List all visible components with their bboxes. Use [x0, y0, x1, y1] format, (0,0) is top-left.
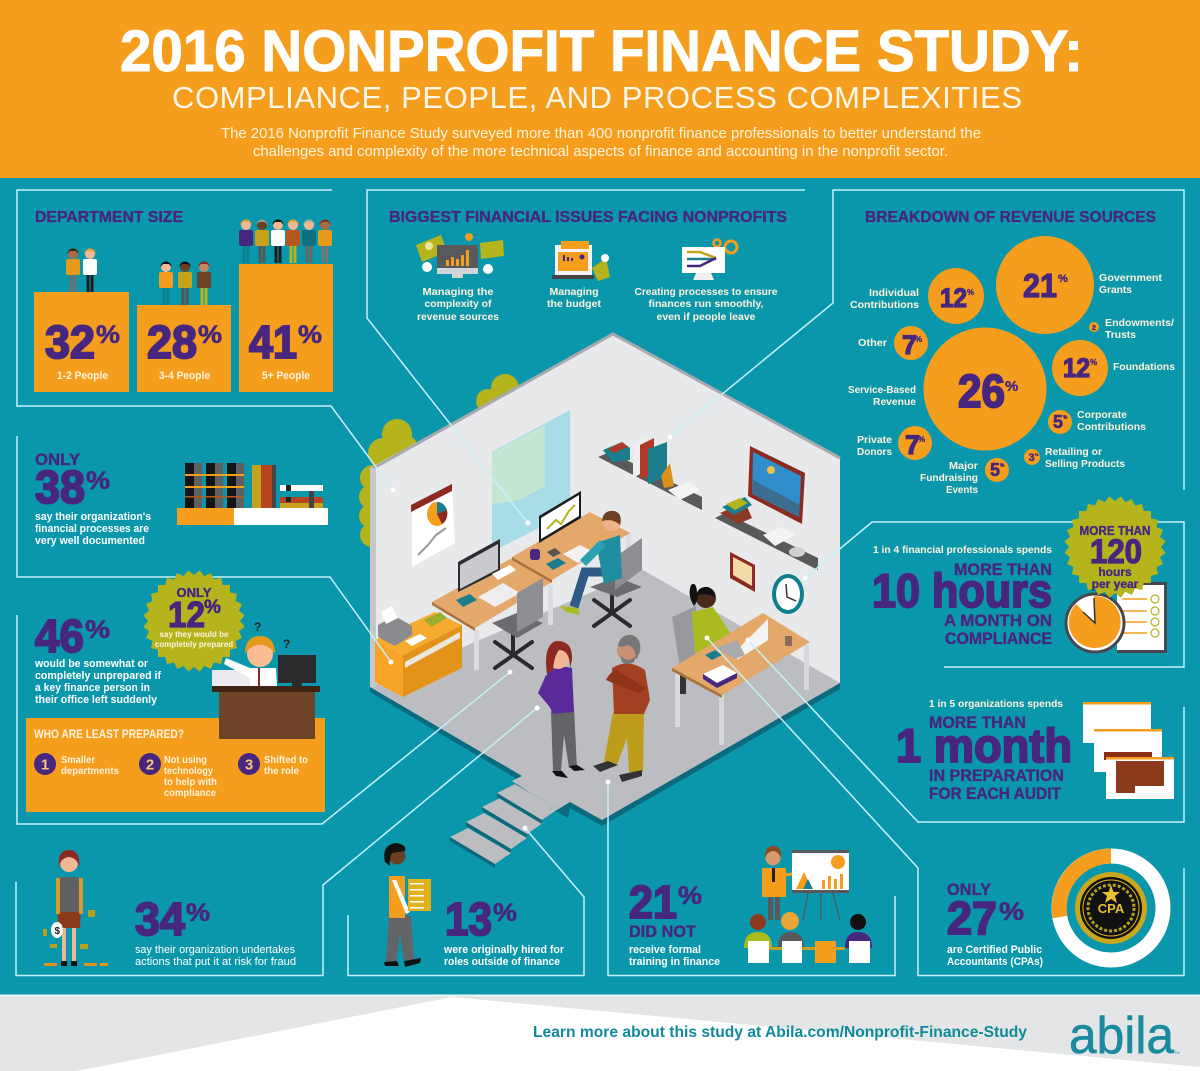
item 2: 2 — [146, 756, 154, 774]
description — [135, 944, 296, 968]
bubble values: % — [1000, 463, 1005, 469]
wall shelf with books — [598, 436, 702, 510]
icon: budget monitor — [552, 241, 610, 281]
text: budget: the budget — [547, 298, 601, 310]
badge: 120 hours: hours — [1098, 565, 1132, 579]
headline: FOR EACH AUDIT — [929, 784, 1062, 803]
room base shadow — [370, 678, 840, 826]
keyboard and papers — [478, 583, 520, 607]
bubble values: % — [1005, 378, 1018, 395]
bubble values: 2 — [1092, 325, 1096, 332]
seated man and chair — [560, 511, 642, 626]
bubble labels: Events — [946, 484, 978, 496]
panel: biggest financial issues — [389, 209, 787, 323]
bubble labels: Endowments/ — [1105, 317, 1174, 329]
text: revenue sources: complexity of — [424, 298, 492, 310]
icon: woman with money bag: $ — [54, 926, 60, 937]
description: their office left suddenly — [35, 694, 158, 706]
heading: BREAKDOWN OF REVENUE SOURCES — [865, 209, 1156, 226]
question marks: ? — [283, 637, 290, 651]
badge: only 12%: 12 — [168, 594, 205, 635]
bubble values: 5 — [990, 460, 1000, 480]
bubble labels: Service-Based — [848, 384, 916, 396]
item 2: to help with — [164, 776, 217, 788]
study link: Learn more about this study at Abila.com/Nonprofit-Finance-Study — [533, 1024, 1027, 1041]
headline: A MONTH ON — [944, 611, 1052, 630]
bubble labels: Fundraising — [920, 472, 978, 484]
text: budget: Managing — [550, 286, 598, 298]
bubble values: 3 — [1028, 452, 1035, 464]
only label: ONLY — [35, 450, 81, 469]
second shelf — [715, 497, 818, 570]
34 percent: 34 — [135, 893, 185, 945]
description: roles outside of finance — [444, 956, 560, 968]
stairs — [450, 784, 558, 868]
bubble values: 12 — [1063, 353, 1090, 383]
badge: only 12%: say they would be — [160, 630, 229, 639]
woman's chair — [672, 606, 700, 694]
bar: 1-2 people: % — [96, 321, 120, 349]
abila logo: abila — [1069, 1007, 1174, 1065]
item 3: Shifted to — [264, 754, 308, 766]
footer — [0, 994, 1200, 1071]
13 percent: 13 — [445, 893, 492, 945]
badge: only 12% — [143, 570, 245, 672]
badge: 120 hours: 120 — [1090, 533, 1142, 571]
bubble labels: Selling Products — [1045, 458, 1125, 470]
27 percent — [947, 892, 1024, 944]
left monitor — [458, 539, 500, 592]
bubble labels: Trusts — [1105, 329, 1136, 341]
did not: DID NOT — [629, 922, 697, 941]
description: Accountants (CPAs) — [947, 956, 1043, 968]
badge: 120 hours: per year — [1092, 577, 1139, 591]
bubble values: % — [967, 288, 974, 297]
bubble labels: Grants — [1099, 284, 1132, 296]
man's legs — [574, 572, 605, 607]
framed picture — [748, 446, 805, 524]
donut chart — [1059, 856, 1163, 960]
badge: 120 hours — [1064, 496, 1166, 598]
27 percent: % — [999, 898, 1024, 926]
description: were originally hired for — [443, 944, 565, 956]
item 1: Smaller — [61, 754, 95, 766]
abila logo: TM — [1174, 1050, 1180, 1055]
text: processes — [634, 286, 778, 323]
bar: 5+ people: % — [298, 321, 322, 349]
item 3: 3 — [245, 756, 253, 774]
text: revenue sources — [417, 286, 499, 323]
27 percent: 27 — [947, 892, 997, 944]
icon: process monitor — [682, 240, 737, 280]
heading: DEPARTMENT SIZE — [35, 209, 183, 226]
bubble labels: Revenue — [873, 396, 916, 408]
people: 5+ — [239, 220, 332, 263]
panel: revenue sources — [848, 209, 1175, 496]
text: processes: finances run smoothly, — [648, 298, 764, 310]
panel: CPAs 27% — [947, 856, 1163, 968]
header band — [0, 0, 1200, 178]
13 percent: % — [493, 899, 517, 927]
bubble values: 5 — [1053, 412, 1063, 432]
bubble labels: Contributions — [1077, 421, 1146, 433]
38 percent: % — [86, 467, 110, 495]
description: completely unprepared if — [35, 670, 161, 682]
man's torso — [596, 535, 622, 584]
description: a key finance person in — [35, 682, 150, 694]
bubbles — [894, 236, 1108, 482]
panel: audit preparation — [896, 698, 1174, 803]
question marks: ? — [254, 620, 261, 634]
bubble labels: Foundations — [1113, 361, 1175, 373]
callout dots — [388, 434, 808, 830]
panel: 46% unprepared — [26, 570, 325, 812]
description — [443, 944, 565, 968]
headline: 10 hours — [872, 564, 1052, 617]
21 percent: % — [678, 882, 702, 910]
icon: shelf of binders — [177, 463, 328, 525]
teal background — [0, 178, 1200, 996]
bar: 3-4 people: 28 — [147, 316, 197, 368]
bubble labels: Retailing or — [1045, 446, 1102, 458]
bar: 3-4 people — [137, 305, 231, 392]
intro text — [221, 126, 981, 160]
left wall edge — [370, 468, 376, 687]
woman at laptop — [690, 584, 735, 655]
bar: 3-4 people: % — [198, 321, 222, 349]
audience — [744, 912, 872, 963]
description: training in finance — [629, 956, 720, 968]
left desk — [432, 539, 553, 670]
headline: COMPLIANCE — [945, 629, 1052, 648]
wall clock — [772, 574, 804, 614]
panel: hired outside finance 13% — [384, 843, 565, 968]
window — [492, 410, 570, 552]
right monitor with line chart — [539, 491, 581, 543]
bubble labels: Donors — [857, 446, 892, 458]
people: 1-2 — [66, 248, 97, 292]
icon: presenter with board — [744, 846, 872, 963]
headline: MORE THAN — [929, 713, 1026, 732]
bubble labels: Government — [1099, 272, 1162, 284]
description: say their organization's — [35, 511, 151, 523]
46 percent: 46 — [35, 610, 84, 662]
bar: 1-2 people: 32 — [45, 316, 95, 368]
intro text: The 2016 Nonprofit Finance Study surveyed more than 400 nonprofit finance professionals to better understand the — [221, 126, 981, 142]
item 2 — [139, 753, 217, 799]
bushes behind the room — [359, 374, 519, 547]
bubble values: % — [1058, 273, 1068, 285]
bar: 5+ people: 5+ People — [262, 370, 310, 382]
phone — [705, 650, 722, 660]
panel: fraud risk 34% — [43, 850, 296, 968]
bubble values: 7 — [905, 430, 920, 460]
text: budget — [547, 286, 601, 310]
bar: 1-2 people: 1-2 People — [57, 370, 108, 382]
text: revenue sources: revenue sources — [417, 311, 499, 323]
intro line: 1 in 4 financial professionals spends — [873, 544, 1052, 556]
bubble labels — [848, 272, 1175, 496]
item 2: compliance — [164, 787, 216, 799]
pen cup — [785, 636, 792, 646]
item 1: departments — [61, 765, 119, 777]
wall poster with pie chart — [411, 484, 455, 567]
filing cabinet with printer — [375, 606, 462, 697]
34 percent — [135, 893, 210, 945]
icon: man carrying papers — [384, 843, 431, 967]
standing woman — [538, 641, 585, 778]
laptop — [737, 619, 768, 660]
38 percent — [35, 461, 110, 513]
intro text: challenges and complexity of the more technical aspects of finance and accounting in the nonprofit sector. — [253, 144, 948, 160]
bar: 5+ people — [239, 264, 333, 392]
21 percent: 21 — [629, 876, 677, 928]
bubble values: % — [918, 435, 925, 444]
text: processes: Creating processes to ensure — [634, 286, 778, 298]
bubble labels: Other — [858, 337, 887, 349]
description: receive formal — [629, 944, 701, 956]
bubble values: 7 — [902, 330, 917, 360]
right desk — [512, 491, 631, 583]
bubble labels: Major — [949, 460, 978, 472]
item 3 — [238, 753, 308, 777]
item 3: the role — [264, 765, 299, 777]
subtitle: COMPLIANCE, PEOPLE, AND PROCESS COMPLEXITIES — [172, 80, 1022, 115]
icon: clock — [1066, 594, 1124, 652]
34 percent: % — [186, 899, 210, 927]
38 percent: 38 — [35, 461, 85, 513]
description — [35, 511, 151, 547]
bar: 5+ people: 41 — [249, 316, 297, 368]
description: very well documented — [35, 535, 145, 547]
intro line: 1 in 5 organizations spends — [929, 698, 1063, 710]
panel: no training 21% — [629, 846, 872, 968]
icon: monitor with revenue — [416, 233, 504, 278]
heading: BIGGEST FINANCIAL ISSUES FACING NONPROFITS — [389, 209, 787, 226]
headline — [872, 560, 1052, 648]
item 1 — [34, 753, 119, 777]
badge: 120 hours: MORE THAN — [1080, 524, 1150, 538]
headline: MORE THAN — [954, 560, 1052, 579]
certificate — [730, 552, 755, 592]
isometric office room — [370, 334, 840, 826]
right desk with laptop — [672, 613, 810, 745]
bubble values: 21 — [1023, 267, 1057, 304]
headline: IN PREPARATION — [929, 766, 1064, 785]
people: 3-4 — [159, 262, 211, 305]
description — [947, 944, 1043, 968]
description: actions that put it at risk for fraud — [135, 956, 296, 968]
description: say their organization undertakes — [135, 944, 295, 956]
mug — [530, 549, 540, 560]
46 percent — [35, 610, 110, 662]
bubble values: 26 — [958, 365, 1005, 417]
headline: 1 month — [896, 719, 1072, 772]
headline — [896, 713, 1072, 803]
badge: only 12%: completely prepared — [155, 640, 233, 649]
standing man — [593, 635, 650, 782]
left office chair — [492, 578, 543, 668]
walls — [370, 334, 840, 687]
question marks — [254, 620, 290, 651]
badge: only 12%: % — [204, 597, 221, 618]
bubble labels: Corporate — [1077, 409, 1127, 421]
panel: compliance hours — [872, 496, 1167, 653]
icon: clipboard — [1117, 582, 1167, 653]
floor — [370, 565, 840, 820]
bubble labels: Individual — [869, 287, 919, 299]
description: are Certified Public — [947, 944, 1042, 956]
46 percent: % — [85, 616, 110, 644]
bubble values: % — [1035, 452, 1039, 457]
bubble labels: Contributions — [850, 299, 919, 311]
description: would be somewhat or — [34, 658, 149, 670]
item 2: Not using — [164, 754, 207, 766]
icon: woman with money bag — [43, 850, 108, 966]
panel: 38% documented processes — [35, 450, 328, 547]
bar: 1-2 people — [34, 292, 129, 392]
icon: CPA seal — [1075, 872, 1147, 944]
only label: ONLY — [947, 880, 992, 899]
box heading: WHO ARE LEAST PREPARED? — [34, 729, 184, 741]
title: 2016 NONPROFIT FINANCE STUDY: — [120, 19, 1083, 84]
bubble values: % — [1090, 358, 1097, 367]
purple box — [703, 665, 737, 683]
bar: 3-4 people: 3-4 People — [159, 370, 210, 382]
bubble labels: Private — [857, 434, 892, 446]
bubble values: 12 — [940, 283, 967, 313]
bubble values: % — [1063, 415, 1068, 421]
description: financial processes are — [35, 523, 149, 535]
tablets and keyboard — [547, 548, 561, 557]
bubble values — [902, 267, 1097, 480]
description — [34, 658, 161, 706]
callout lines connecting panels to room — [16, 190, 1184, 976]
panel: department size — [34, 209, 333, 392]
text: revenue sources: Managing the — [422, 286, 494, 298]
icon: confused man at desk — [212, 620, 320, 739]
item 1: 1 — [41, 756, 49, 774]
description — [629, 944, 720, 968]
who are least prepared box — [26, 718, 325, 812]
badge: only 12%: ONLY — [177, 585, 212, 600]
text: processes: even if people leave — [656, 311, 756, 323]
icon: calendars — [1083, 702, 1174, 799]
icon: CPA seal: CPA — [1098, 901, 1125, 916]
bubble values: % — [915, 335, 922, 344]
item 2: technology — [164, 765, 213, 777]
wall top edge — [370, 334, 840, 470]
